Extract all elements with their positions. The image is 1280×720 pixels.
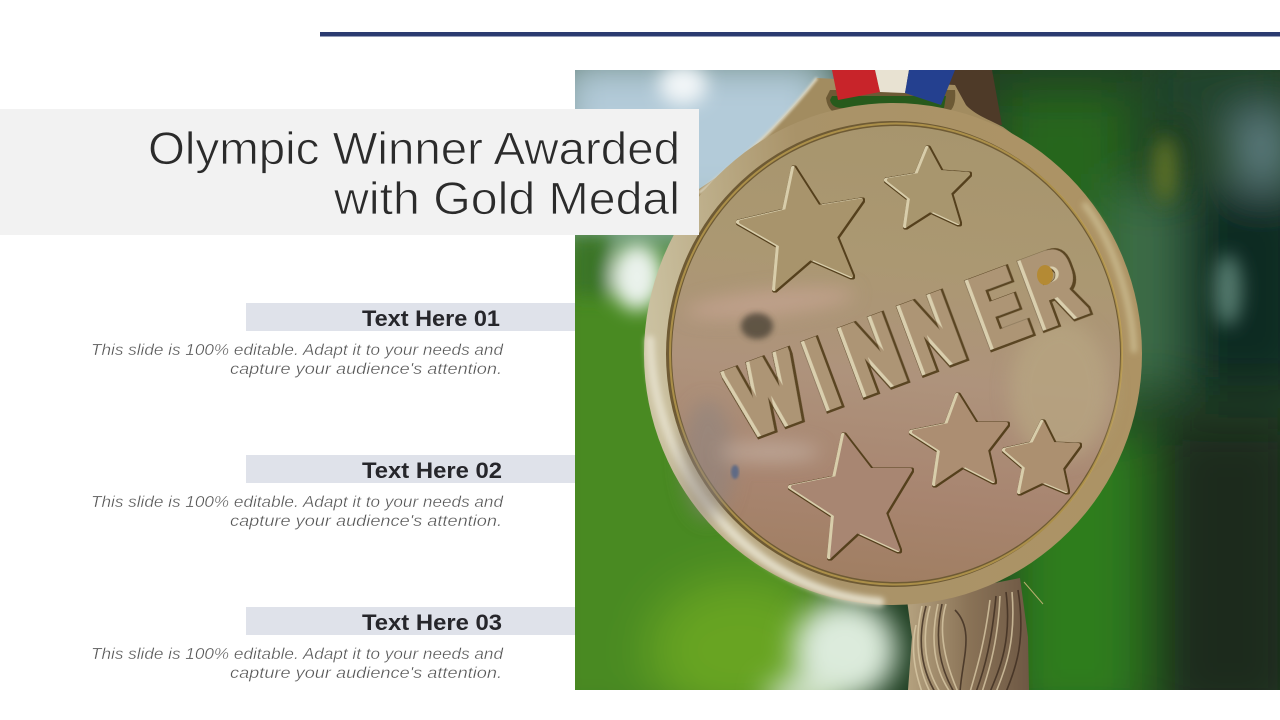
star 4: [911, 395, 1006, 484]
medal disc: [644, 103, 1142, 605]
item 02: capture your audience's attention.: [230, 513, 502, 530]
item 03: Text Here 03: [362, 610, 502, 635]
item 03: capture your audience's attention.: [230, 665, 502, 682]
rope below medal: [907, 578, 1029, 692]
medal face: [672, 126, 1120, 582]
ribbon: red, white and blue: [832, 70, 955, 105]
medal inner ring: [666, 121, 1122, 587]
medal surface shading: [682, 282, 1110, 520]
medal suspension loop: [699, 76, 1012, 196]
star 2: [886, 148, 968, 226]
title text: [148, 123, 680, 224]
star 1: [738, 168, 861, 289]
title text: with Gold Medal: [333, 173, 680, 224]
star 5: [1004, 422, 1078, 492]
item 01: [91, 303, 575, 378]
item 03: This slide is 100% editable. Adapt it to your needs and: [91, 646, 504, 663]
item 02: This slide is 100% editable. Adapt it to your needs and: [91, 494, 504, 511]
photo: gold medal: [575, 70, 1280, 690]
item 01: Text Here 01: [362, 306, 500, 331]
star 3: [790, 435, 910, 557]
photo background foliage: [575, 70, 1280, 690]
medal outer rim: [644, 103, 1142, 605]
item 02: [91, 455, 575, 530]
item 01: This slide is 100% editable. Adapt it to your needs and: [91, 342, 504, 359]
item 02: Text Here 02: [362, 458, 502, 483]
top accent bar: [320, 32, 1280, 36]
title panel: [0, 109, 699, 235]
embossed word on medal: WINNER: [717, 227, 1095, 459]
item 03: [91, 607, 575, 682]
title text: Olympic Winner Awarded: [148, 123, 680, 174]
rope above medal: [900, 70, 1002, 125]
item 01: capture your audience's attention.: [230, 361, 502, 378]
